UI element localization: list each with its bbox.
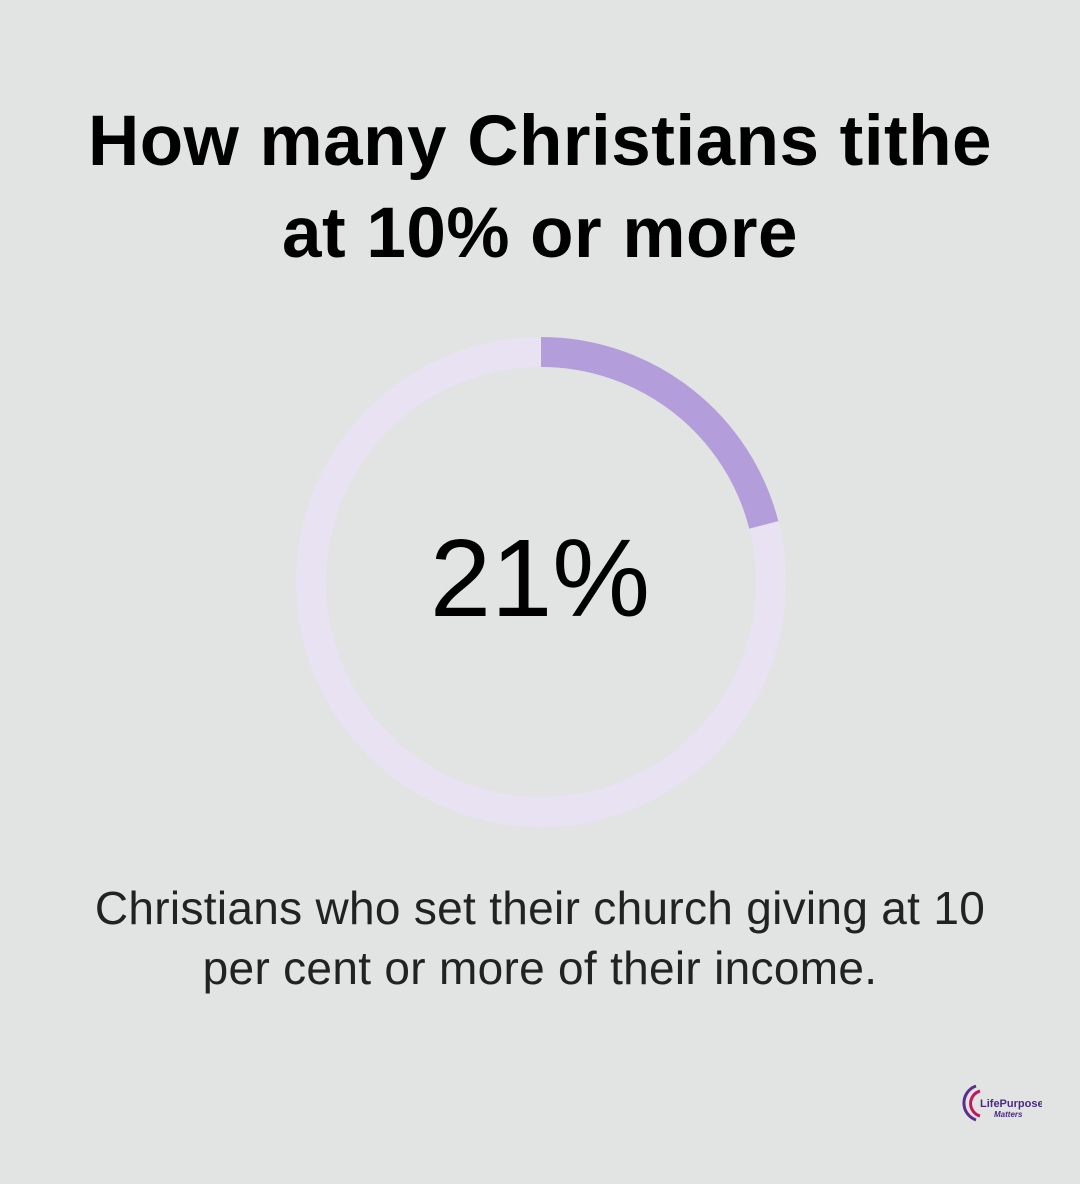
title: at 10% or more xyxy=(282,194,798,273)
description: per cent or more of their income. xyxy=(203,942,877,994)
title xyxy=(88,102,992,273)
logo: Matters xyxy=(994,1110,1023,1119)
title: How many Christians tithe xyxy=(88,102,992,181)
logo: LifePurpose xyxy=(980,1098,1042,1110)
description xyxy=(95,882,985,994)
logo xyxy=(962,1084,1042,1122)
description: Christians who set their church giving at 10 xyxy=(95,882,985,934)
percentage value: 21% xyxy=(430,517,650,640)
